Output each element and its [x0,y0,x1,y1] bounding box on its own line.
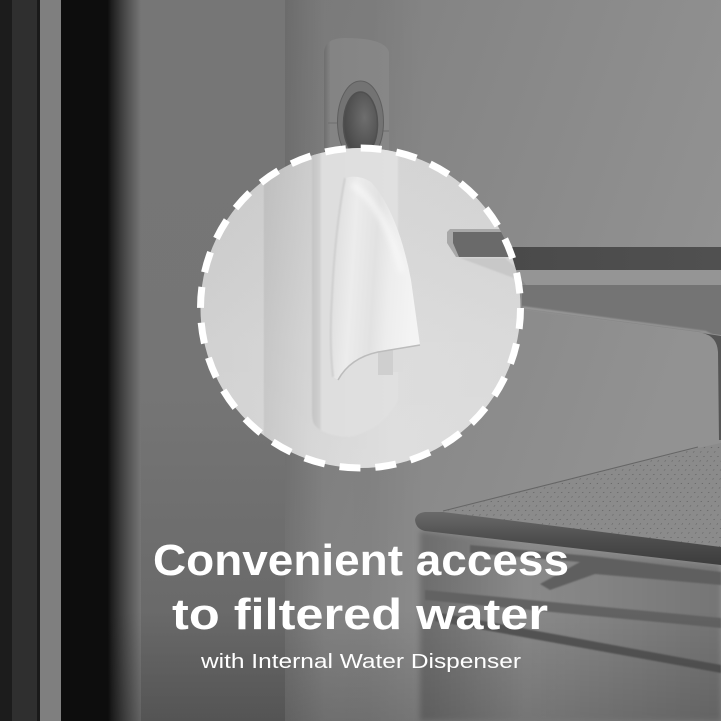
bins below the shelf [108,531,721,721]
wall plate above magnifier [324,38,389,163]
heading line 1: Convenient access [153,536,569,585]
door edge dark stripes [0,0,141,721]
heading line 2: to filtered water [172,590,548,639]
shelf bracket inside magnifier [447,229,523,278]
lower shelf with dotted glass [415,443,721,565]
dispenser nozzle [378,350,393,375]
dispenser back plate [312,140,398,437]
dispenser spout [331,177,420,380]
upper shelf [505,247,721,440]
dashed circle outline [200,148,520,468]
subheading: with Internal Water Dispenser [200,651,521,673]
magnified dispenser view [198,140,523,471]
